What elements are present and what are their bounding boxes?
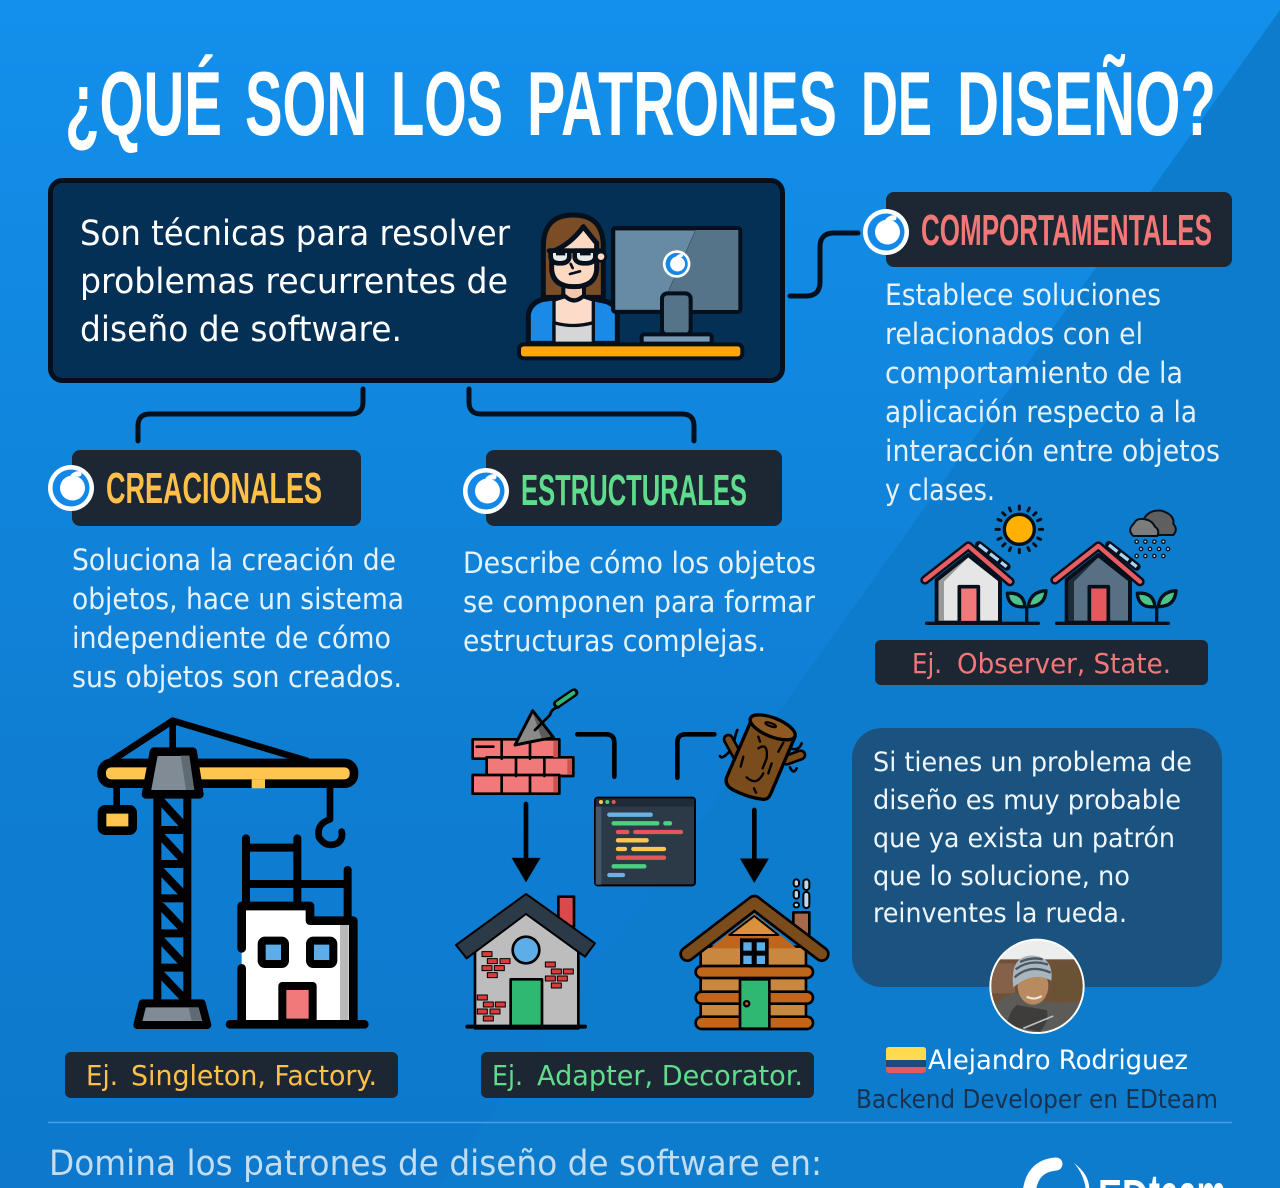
panel: comportamentales	[863, 192, 1232, 685]
icon: code window	[595, 798, 695, 885]
heading: comportamentales	[863, 192, 1232, 267]
call to action: Domina los patrones de diseño de software en:	[49, 1144, 822, 1184]
definition text: Son técnicas para resolver	[80, 214, 511, 254]
connector: definition to estructurales	[469, 389, 694, 441]
heading: estructurales: ESTRUCTURALES	[521, 466, 747, 515]
title: PATRONES	[527, 54, 837, 155]
arrow: bricks to house	[512, 804, 540, 882]
arrow: wood to code	[677, 734, 714, 778]
icon: flag of Colombia	[886, 1047, 926, 1073]
text: estructurales description: estructuras complejas.	[463, 624, 766, 658]
diagram: bricks and wood to houses	[456, 693, 822, 1029]
icon: log cabin	[687, 879, 822, 1029]
example: comportamentales: Ej.	[912, 647, 942, 680]
quote text: que ya exista un patrón	[873, 823, 1175, 854]
example: estructurales	[481, 1052, 814, 1098]
title: DE	[861, 54, 932, 155]
quote text: reinventes la rueda.	[873, 898, 1127, 929]
panel: definition	[50, 180, 782, 380]
text: creacionales description: objetos, hace un sistema	[72, 582, 404, 616]
text: comportamentales description: comportamiento de la	[885, 356, 1183, 390]
quote text: Si tienes un problema de	[873, 747, 1192, 778]
panel: estructurales	[456, 450, 822, 1098]
author name with flag: Alejandro Rodriguez	[928, 1045, 1188, 1076]
example: estructurales: Adapter, Decorator.	[537, 1059, 803, 1092]
quote text: diseño es muy probable	[873, 785, 1181, 816]
author photo	[989, 938, 1087, 1036]
example: comportamentales: Observer, State.	[957, 647, 1171, 680]
arrow: bricks to code	[577, 734, 614, 777]
icon: log	[720, 710, 802, 799]
example: creacionales: Ej.	[86, 1059, 118, 1092]
quote text: que lo solucione, no	[873, 861, 1130, 892]
definition text: diseño de software.	[80, 310, 402, 350]
text: comportamentales description: relacionados con el	[885, 317, 1143, 351]
arrow: wood to cabin	[740, 810, 769, 883]
logo: EDteam	[1029, 1163, 1226, 1188]
panel: creacionales	[48, 450, 404, 1098]
example: comportamentales	[875, 640, 1208, 685]
heading: creacionales: CREACIONALES	[106, 464, 322, 513]
heading: creacionales	[48, 450, 361, 526]
icon: brick house	[456, 894, 595, 1028]
text: comportamentales description: interacción entre objetos	[885, 434, 1220, 468]
icon: houses in sun and rain	[925, 506, 1176, 623]
example: creacionales: Singleton, Factory.	[131, 1059, 377, 1092]
text: comportamentales description: aplicación respecto a la	[885, 395, 1197, 429]
panel: quote	[852, 728, 1222, 1036]
text: creacionales description: Soluciona la creación de	[72, 543, 396, 577]
text: comportamentales description: y clases.	[885, 473, 995, 507]
text: comportamentales description: Establece soluciones	[885, 278, 1161, 312]
icon: developer at computer	[519, 215, 742, 358]
title: SON	[245, 54, 367, 155]
title: LOS	[391, 54, 503, 155]
heading: estructurales	[463, 450, 782, 526]
connector: definition to creacionales	[138, 389, 363, 441]
text: creacionales description: independiente de cómo	[72, 621, 391, 655]
connector: definition to comportamentales	[790, 233, 858, 296]
author role: Backend Developer en EDteam	[856, 1085, 1218, 1115]
text: estructurales description: Describe cómo los objetos	[463, 546, 816, 580]
example: creacionales	[65, 1052, 398, 1098]
text: estructurales description: se componen para formar	[463, 585, 815, 619]
definition text: problemas recurrentes de	[80, 262, 508, 302]
example: estructurales: Ej.	[492, 1059, 523, 1092]
text: creacionales description: sus objetos son creados.	[72, 660, 402, 694]
icon: crane and building	[102, 721, 364, 1025]
icon: bricks and trowel	[473, 693, 574, 794]
title: ¿QUÉ	[65, 54, 222, 155]
